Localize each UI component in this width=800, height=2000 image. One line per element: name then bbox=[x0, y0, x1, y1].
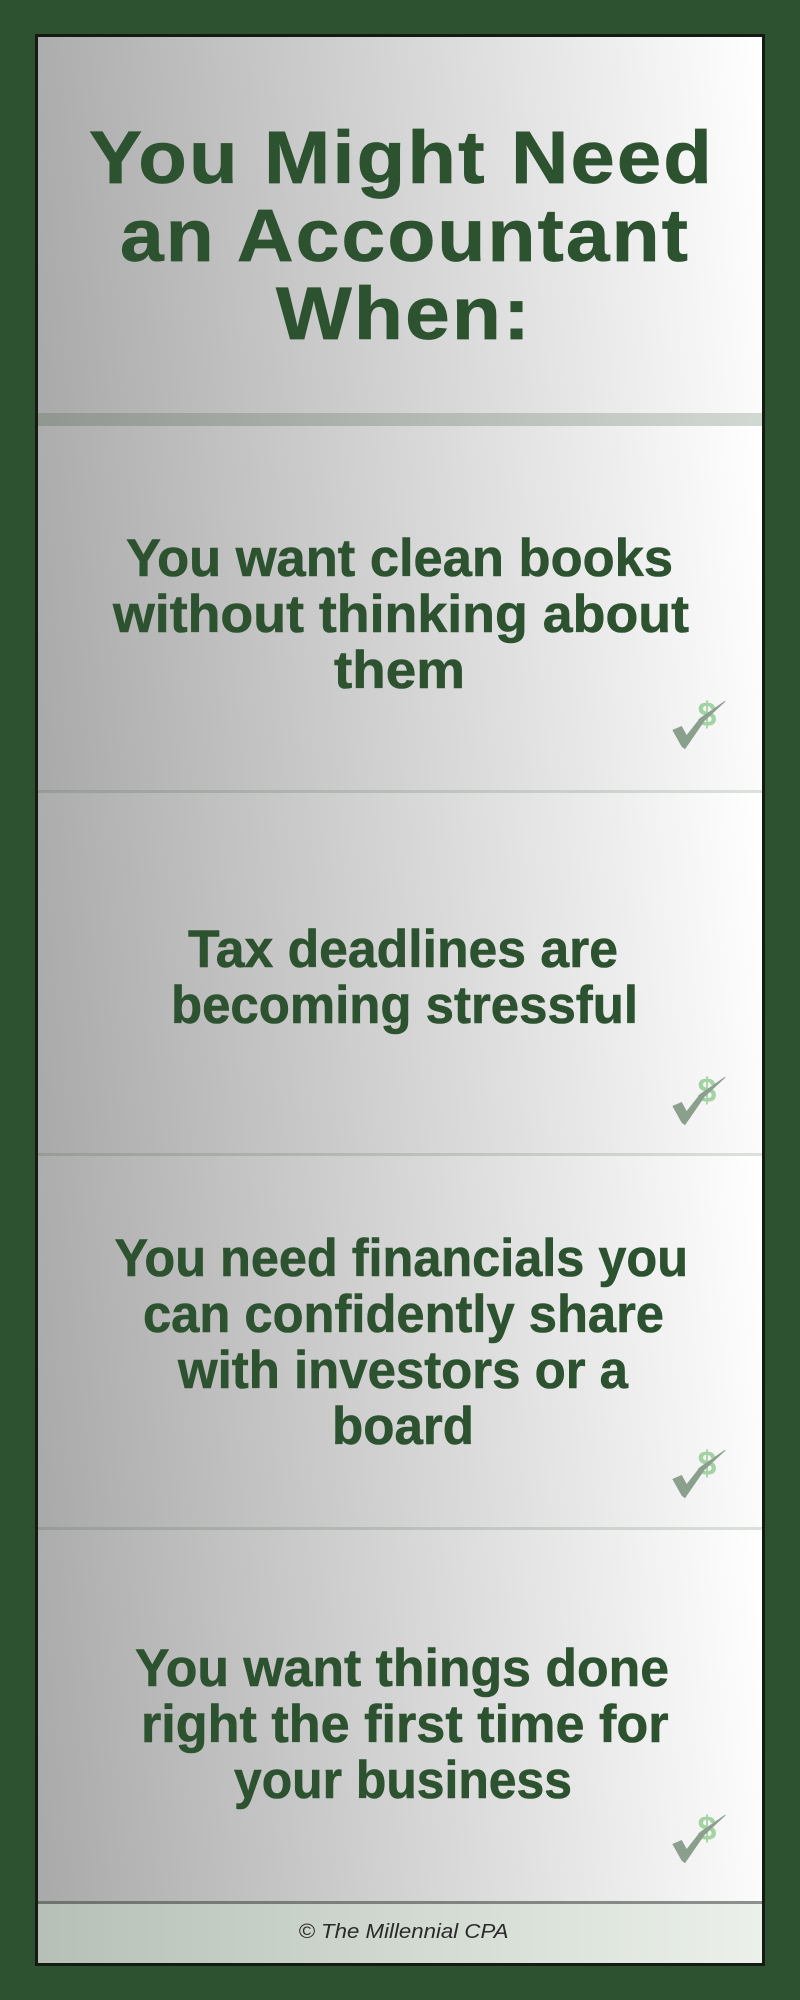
panel: footer bbox=[38, 1901, 762, 1963]
statement: tax deadlines bbox=[171, 920, 638, 1035]
panel: header bbox=[38, 37, 762, 426]
panel: done right bbox=[38, 1530, 762, 1901]
statement: investor financials: can confidently share bbox=[143, 1285, 664, 1344]
icon: dollar check mark: $ bbox=[698, 1810, 717, 1848]
panel: investor financials bbox=[38, 1156, 762, 1530]
statement: done right: right the first time for bbox=[141, 1695, 668, 1754]
panel: clean books bbox=[38, 426, 762, 793]
statement: done right bbox=[135, 1639, 669, 1810]
statement: investor financials: You need financials you bbox=[114, 1229, 688, 1288]
statement: tax deadlines: Tax deadlines are bbox=[188, 920, 618, 979]
statement: clean books: without thinking about bbox=[112, 585, 689, 644]
icon: dollar check mark bbox=[672, 1072, 726, 1126]
statement: investor financials: with investors or a bbox=[177, 1341, 629, 1400]
statement: done right: your business bbox=[234, 1751, 572, 1810]
statement: done right: You want things done bbox=[135, 1639, 669, 1698]
icon: dollar check mark bbox=[672, 696, 726, 750]
title: When: bbox=[276, 272, 532, 355]
icon: dollar check mark bbox=[672, 1810, 726, 1864]
statement: clean books: them bbox=[334, 641, 465, 700]
statement: investor financials bbox=[114, 1229, 688, 1456]
title: an Accountant bbox=[120, 194, 690, 277]
panel: tax deadlines bbox=[38, 793, 762, 1156]
title: You Might Need bbox=[89, 116, 714, 199]
icon: dollar check mark: $ bbox=[698, 1072, 717, 1110]
icon: dollar check mark bbox=[672, 1445, 726, 1498]
statement: tax deadlines: becoming stressful bbox=[171, 976, 638, 1035]
icon: dollar check mark: $ bbox=[698, 696, 717, 734]
footer credit: © The Millennial CPA bbox=[298, 1920, 508, 1943]
statement: clean books: You want clean books bbox=[126, 529, 673, 588]
statement: investor financials: board bbox=[332, 1397, 474, 1456]
title bbox=[89, 116, 714, 355]
statement: clean books bbox=[112, 529, 689, 700]
icon: dollar check mark: $ bbox=[698, 1445, 717, 1483]
